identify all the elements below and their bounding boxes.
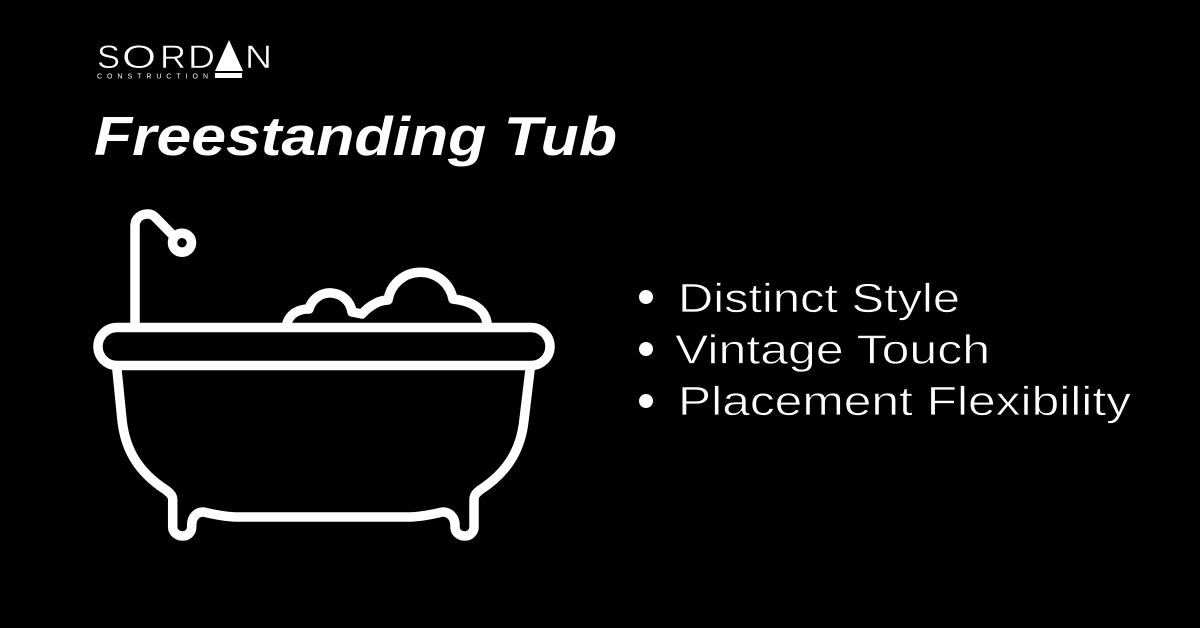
bullet: Placement Flexibility: Placement Flexibility bbox=[678, 378, 1132, 424]
logo: Sordan Construction: O bbox=[122, 39, 156, 75]
logo: Sordan Construction bbox=[97, 39, 272, 80]
logo: Sordan Construction: S bbox=[97, 39, 120, 75]
logo: Sordan Construction: D bbox=[188, 39, 215, 75]
title: Freestanding Tub bbox=[94, 105, 617, 167]
bullet list bbox=[639, 275, 1132, 424]
logo: Sordan Construction: R bbox=[160, 39, 186, 75]
icon: freestanding bathtub bbox=[98, 214, 550, 536]
foam bubbles bbox=[287, 272, 487, 323]
bullet: Distinct Style: Distinct Style bbox=[678, 275, 960, 321]
tub rim bbox=[98, 328, 550, 366]
bullet: Vintage Touch: Vintage Touch bbox=[675, 326, 990, 372]
shower head bbox=[172, 233, 192, 252]
logo: Sordan Construction: CONSTRUCTION bbox=[97, 74, 208, 80]
shower pipe bbox=[135, 214, 173, 323]
tub basin and feet bbox=[117, 370, 530, 536]
logo: Sordan Construction: N bbox=[245, 39, 272, 75]
